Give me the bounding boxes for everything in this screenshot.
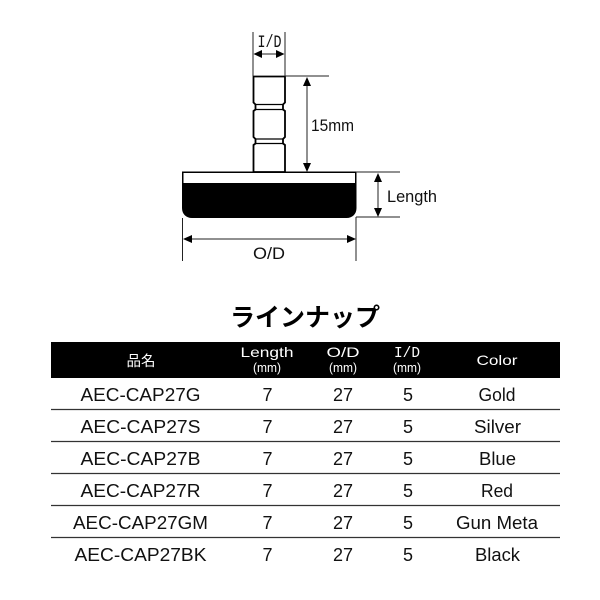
Length dimension [356, 172, 437, 261]
table header: (mm) [393, 360, 421, 375]
table header [51, 342, 560, 378]
row: blue: 5 [403, 449, 413, 469]
row: silver: 5 [403, 417, 413, 437]
row: black: Black [475, 545, 521, 565]
row: gun meta: AEC-CAP27GM [73, 513, 208, 533]
table header: (mm) [329, 360, 357, 375]
Length dimension: Length [387, 188, 437, 206]
O/D dimension [182, 218, 356, 263]
table header: I/D [394, 345, 420, 362]
row: black: 7 [262, 545, 273, 565]
dimension diagram [182, 32, 437, 263]
row: blue [80, 449, 516, 469]
row: silver: Silver [474, 417, 521, 437]
row: gold: 5 [403, 385, 413, 405]
row: gold: 7 [262, 385, 273, 405]
row: gold: 27 [333, 385, 353, 405]
row: gold: AEC-CAP27G [80, 385, 200, 405]
row: red: Red [481, 481, 513, 501]
title: ラインナップ [230, 304, 380, 332]
row: black: AEC-CAP27BK [74, 545, 206, 565]
row: blue: AEC-CAP27B [80, 449, 200, 469]
table header: (mm) [253, 360, 281, 375]
row: silver: 7 [262, 417, 273, 437]
row: blue: 7 [262, 449, 273, 469]
row: gun meta: 5 [403, 513, 413, 533]
I/D dimension: I/D [258, 33, 282, 53]
row: silver [80, 417, 521, 437]
table rows [73, 385, 539, 565]
row: silver: 27 [333, 417, 353, 437]
O/D dimension: O/D [253, 244, 285, 263]
row: black: 5 [403, 545, 413, 565]
I/D dimension [253, 32, 285, 76]
row: red: 5 [403, 481, 413, 501]
row: gun meta [73, 513, 539, 533]
cap base [182, 172, 356, 218]
table header: Color [476, 352, 518, 368]
15mm dimension [285, 76, 354, 172]
row: gun meta: 27 [333, 513, 353, 533]
row: gold [80, 385, 516, 405]
row: black: 27 [333, 545, 353, 565]
table header: Length [240, 344, 294, 360]
row: gun meta: Gun Meta [456, 513, 539, 533]
15mm dimension: 15mm [311, 117, 354, 135]
row: blue: Blue [479, 449, 516, 469]
stem of cap [254, 76, 285, 172]
row: gun meta: 7 [262, 513, 273, 533]
row: gold: Gold [478, 385, 516, 405]
row: blue: 27 [333, 449, 353, 469]
row: black [74, 545, 521, 565]
row: red: 7 [262, 481, 273, 501]
row: red: 27 [333, 481, 353, 501]
table header: O/D [326, 344, 360, 360]
row: silver: AEC-CAP27S [80, 417, 200, 437]
lineup table [51, 342, 560, 565]
row: red: AEC-CAP27R [80, 481, 200, 501]
table header: 品名 [126, 353, 156, 370]
row: red [80, 481, 513, 501]
